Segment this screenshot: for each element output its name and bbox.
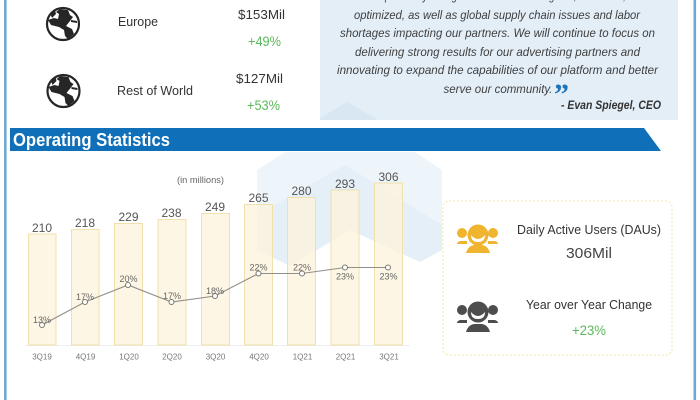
bar value labels: 238 — [161, 206, 182, 220]
DAU text: Daily Active Users (DAUs) — [517, 222, 661, 237]
quarter axis labels: 2Q20 — [162, 352, 182, 362]
chart unit note: (in millions) — [177, 175, 224, 185]
row: Rest of World: +53% — [247, 97, 280, 113]
row: Europe: +49% — [248, 33, 281, 49]
icon: users gray — [457, 302, 498, 332]
quarter axis labels: 3Q20 — [206, 352, 226, 362]
row: Rest of World: $127Mil — [236, 71, 283, 86]
panel: DAU summary — [443, 201, 672, 355]
percent labels: 13% — [33, 315, 51, 325]
icon: globe Europe — [47, 8, 79, 40]
bar value labels — [32, 170, 399, 235]
row: Europe — [118, 7, 285, 49]
quote text: delivering strong results for our advertising partners and — [355, 45, 640, 59]
bar value labels: 265 — [248, 191, 269, 205]
percent labels: 20% — [119, 274, 138, 284]
quarter axis labels: 1Q21 — [293, 352, 313, 362]
panel: regional revenue — [47, 7, 285, 113]
percent labels — [33, 262, 398, 325]
row: Rest of World: Rest of World — [117, 83, 193, 98]
year over year text: +23% — [572, 323, 606, 338]
bar value labels: 249 — [205, 200, 225, 214]
bar value labels: 210 — [32, 221, 52, 235]
bar value labels: 280 — [291, 184, 312, 198]
quarter axis labels: 3Q19 — [32, 352, 52, 362]
icon: closing quote mark: ” — [554, 78, 569, 111]
bar value labels: 306 — [378, 170, 399, 184]
quarter axis labels: 3Q21 — [379, 352, 399, 362]
percent labels: 23% — [379, 272, 398, 282]
quote text: innovating to expand the capabilities of our platform and better — [337, 63, 659, 77]
panel: quote — [320, 0, 678, 120]
heading: Operating Statistics — [10, 128, 661, 151]
percent labels: 22% — [293, 262, 311, 272]
icon: globe Rest of World — [48, 75, 80, 107]
quote text: optimized, as well as global supply chain issues and labor — [354, 8, 641, 22]
quarter axis labels: 1Q20 — [119, 352, 139, 362]
year over year line — [40, 265, 390, 328]
year over year text — [526, 297, 652, 338]
watermark logo — [257, 152, 442, 266]
bar value labels: 229 — [118, 210, 139, 224]
chart: daily active users by quarter — [25, 170, 410, 362]
row: Rest of World — [117, 71, 283, 113]
year over year text: Year over Year Change — [526, 297, 652, 312]
percent labels: 17% — [76, 292, 94, 302]
quote text: shortages impacting our partners. We will continue to focus on — [340, 26, 655, 40]
percent labels: 22% — [249, 262, 268, 272]
quarter axis labels: 4Q20 — [249, 352, 269, 362]
quarter axis labels — [32, 352, 399, 362]
quarter axis labels: 2Q21 — [336, 352, 356, 362]
row: Europe: $153Mil — [238, 7, 285, 22]
quote attribution: - Evan Spiegel, CEO — [561, 98, 662, 112]
DAU text: 306Mil — [566, 246, 612, 262]
icon: users yellow — [457, 224, 498, 253]
percent labels: 18% — [206, 286, 224, 296]
percent labels: 23% — [336, 272, 354, 282]
heading: Operating Statistics: Operating Statistics — [13, 130, 170, 150]
bar value labels: 293 — [335, 177, 355, 191]
DAU text — [517, 222, 661, 262]
quote text: serve our community. — [444, 82, 552, 96]
quote text — [337, 0, 659, 96]
percent labels: 17% — [163, 291, 181, 301]
quarter axis labels: 4Q19 — [76, 352, 96, 362]
bar value labels: 218 — [75, 216, 95, 230]
bars — [28, 183, 402, 345]
row: Europe: Europe — [118, 14, 158, 29]
